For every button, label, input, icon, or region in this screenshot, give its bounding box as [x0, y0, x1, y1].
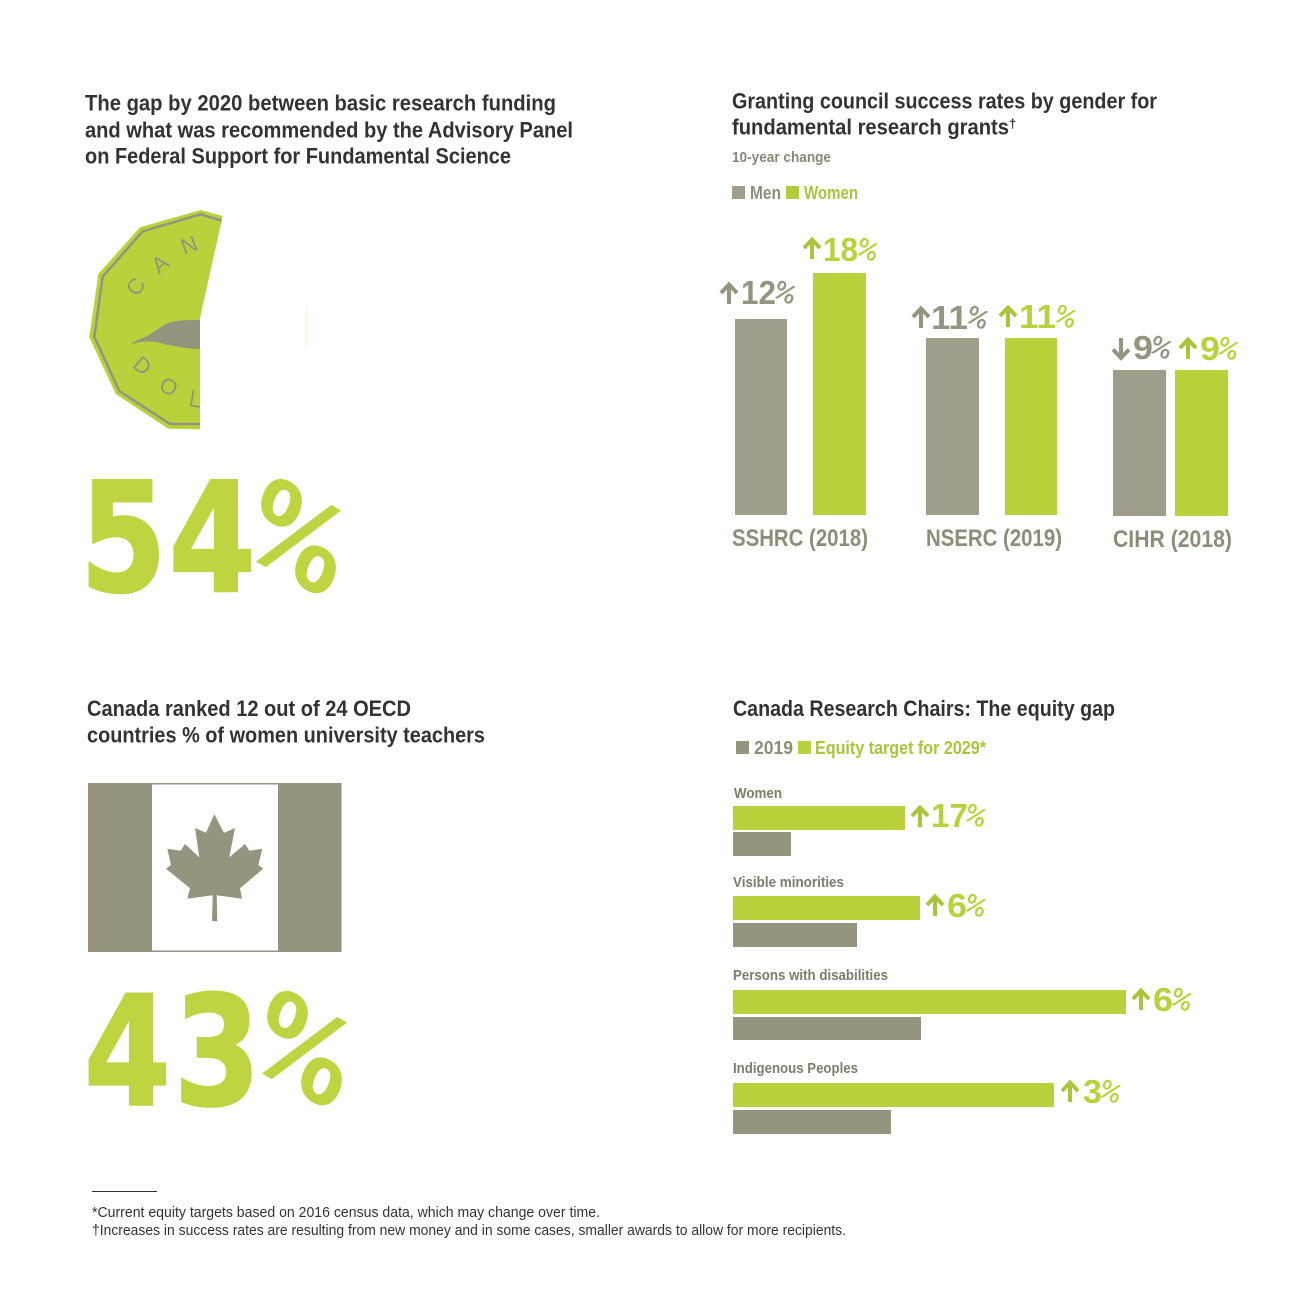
icon: partial loonie coin: C [121, 273, 151, 300]
heading: success rates: † [1009, 116, 1016, 131]
big number: 54%: 54 [80, 450, 256, 627]
footnotes [92, 1204, 846, 1239]
heading: OECD ranking [87, 696, 485, 748]
group: SSHRC: 12 [741, 274, 776, 311]
group: CIHR [1113, 329, 1244, 553]
heading: funding gap [85, 90, 573, 168]
group: SSHRC: % [851, 232, 884, 267]
legend: men and women [732, 183, 858, 203]
heading: success rates: fundamental research grants [732, 114, 1009, 140]
bar group: women [733, 785, 992, 856]
bar group: persons with disabilities: 6 [1153, 981, 1173, 1018]
heading: funding gap: and what was recommended by the Advisory Panel [85, 118, 573, 142]
legend: men and women: Women [804, 183, 858, 203]
bar group: Indigenous Peoples [733, 1060, 1127, 1134]
group: CIHR: % [1212, 331, 1244, 366]
heading: success rates: Granting council success rates by gender for [732, 88, 1157, 114]
bar group: persons with disabilities: % [1165, 982, 1198, 1017]
group: CIHR: % [1145, 330, 1177, 365]
big number: 43%: 43 [84, 963, 261, 1141]
panel: granting council success rates [721, 88, 1244, 553]
icon: partial loonie coin: N [177, 231, 201, 259]
bar group: Indigenous Peoples: Indigenous Peoples [733, 1060, 858, 1077]
heading: OECD ranking: countries % of women university teachers [87, 722, 485, 748]
group: NSERC: % [961, 300, 994, 335]
group: NSERC: 11 [1019, 298, 1056, 335]
legend: 2019 and equity target: 2019 [754, 738, 793, 758]
bar group: Indigenous Peoples: 3 [1083, 1073, 1102, 1110]
big number: 43%: % [232, 962, 375, 1138]
group: SSHRC [721, 231, 884, 552]
bar group: women: % [959, 798, 992, 833]
panel: OECD ranking [84, 696, 485, 1141]
group: CIHR: 9 [1200, 330, 1220, 367]
icon: partial loonie coin: D [128, 351, 157, 380]
bar group: persons with disabilities [733, 967, 1198, 1040]
big number: 43% [84, 962, 375, 1141]
footnotes: †Increases in success rates are resulting from new money and in some cases, smaller awards to allow for more recipients. [92, 1222, 846, 1239]
bar group: Indigenous Peoples: % [1094, 1074, 1127, 1109]
big number: 54% [80, 450, 369, 627]
bar group: visible minorities: Visible minorities [733, 874, 844, 891]
footnotes: *Current equity targets based on 2016 census data, which may change over time. [92, 1204, 600, 1221]
panel: basic research funding gap [80, 90, 573, 627]
icon: partial loonie coin [89, 210, 307, 429]
group: SSHRC: SSHRC (2018) [732, 525, 868, 552]
legend: 2019 and equity target [736, 738, 986, 758]
group: NSERC: % [1049, 299, 1082, 334]
legend: men and women: Men [750, 183, 781, 203]
icon: Canadian flag [88, 783, 342, 952]
group: NSERC: 11 [931, 299, 968, 336]
group: SSHRC: 18 [823, 231, 858, 268]
heading: equity gap: Canada Research Chairs: The equity gap [733, 696, 1115, 721]
bar chart: success rate changes [721, 231, 1244, 553]
bar group: visible minorities: 6 [947, 887, 967, 924]
bar group: women: 17 [931, 797, 968, 834]
bar group: women: Women [734, 785, 782, 802]
panel: Canada Research Chairs equity gap [733, 696, 1198, 1134]
subheading: 10-year change: 10-year change [732, 149, 831, 166]
bar group: persons with disabilities: Persons with disabilities [733, 967, 888, 984]
heading: success rates [732, 88, 1157, 140]
group: CIHR: 9 [1133, 329, 1153, 366]
bar group: visible minorities: % [959, 888, 992, 923]
group: SSHRC: % [769, 275, 801, 310]
group: NSERC [913, 298, 1082, 552]
heading: funding gap: on Federal Support for Fundamental Science [85, 144, 511, 168]
big number: 54%: % [226, 450, 369, 626]
bar group: visible minorities [733, 874, 992, 947]
heading: OECD ranking: Canada ranked 12 out of 24 OECD [87, 696, 411, 721]
icon: partial loonie coin: A [147, 249, 174, 278]
icon: partial loonie coin: O [156, 372, 182, 402]
group: NSERC: NSERC (2019) [926, 525, 1062, 552]
legend: 2019 and equity target: Equity target for 2029* [815, 738, 986, 758]
heading: funding gap: The gap by 2020 between basic research funding [85, 90, 556, 116]
group: CIHR: CIHR (2018) [1113, 526, 1232, 553]
